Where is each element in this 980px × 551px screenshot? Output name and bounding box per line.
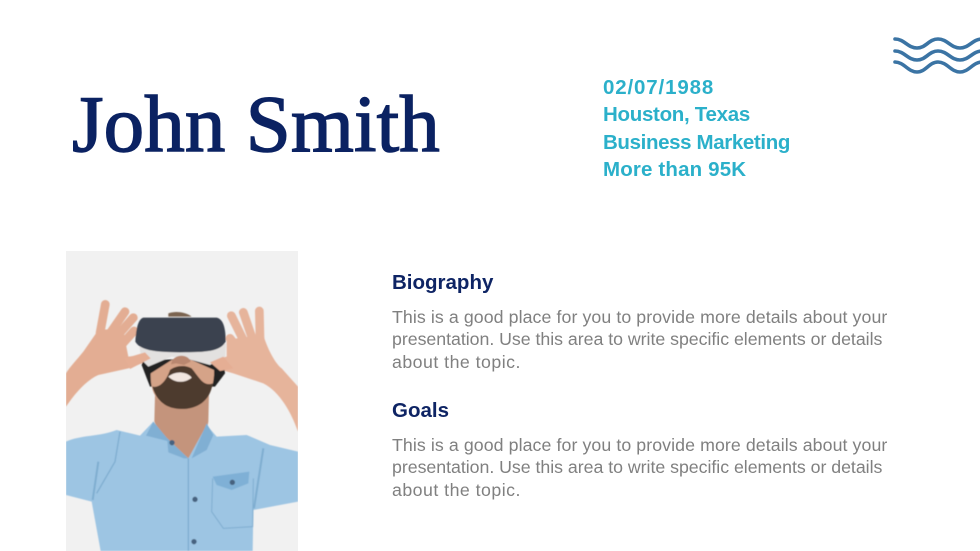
personal details list xyxy=(603,76,790,181)
personal details list: More than 95K xyxy=(603,158,746,181)
left arm and hand xyxy=(66,304,151,407)
goals text xyxy=(392,435,887,500)
icon: waves xyxy=(893,37,980,74)
personal details list: 02/07/1988 xyxy=(603,76,714,98)
biography text xyxy=(392,307,887,372)
right arm and hand xyxy=(210,311,298,432)
heading: biography: Biography xyxy=(392,271,493,294)
buttons xyxy=(169,440,235,544)
neck xyxy=(154,392,209,458)
title: John Smith xyxy=(72,79,440,169)
headset rear strap xyxy=(142,358,225,387)
collar xyxy=(146,422,213,458)
thumbs xyxy=(125,352,233,371)
photo: man wearing VR headset xyxy=(66,251,298,551)
mouth xyxy=(168,373,192,382)
goals text: presentation. Use this area to write specific elements or details xyxy=(392,457,882,477)
shirt shading xyxy=(93,432,263,551)
head, face and beard xyxy=(151,360,214,408)
pocket flap xyxy=(213,472,249,490)
shirt xyxy=(66,422,298,551)
heading: goals: Goals xyxy=(392,399,449,422)
goals text: This is a good place for you to provide more details about your xyxy=(392,435,887,455)
personal details list: Business Marketing xyxy=(603,131,790,154)
personal details list: Houston, Texas xyxy=(603,103,750,126)
biography text: about the topic. xyxy=(392,352,521,372)
biography text: presentation. Use this area to write specific elements or details xyxy=(392,329,882,349)
goals text: about the topic. xyxy=(392,480,521,500)
headset xyxy=(139,343,226,367)
biography text: This is a good place for you to provide more details about your xyxy=(392,307,887,327)
